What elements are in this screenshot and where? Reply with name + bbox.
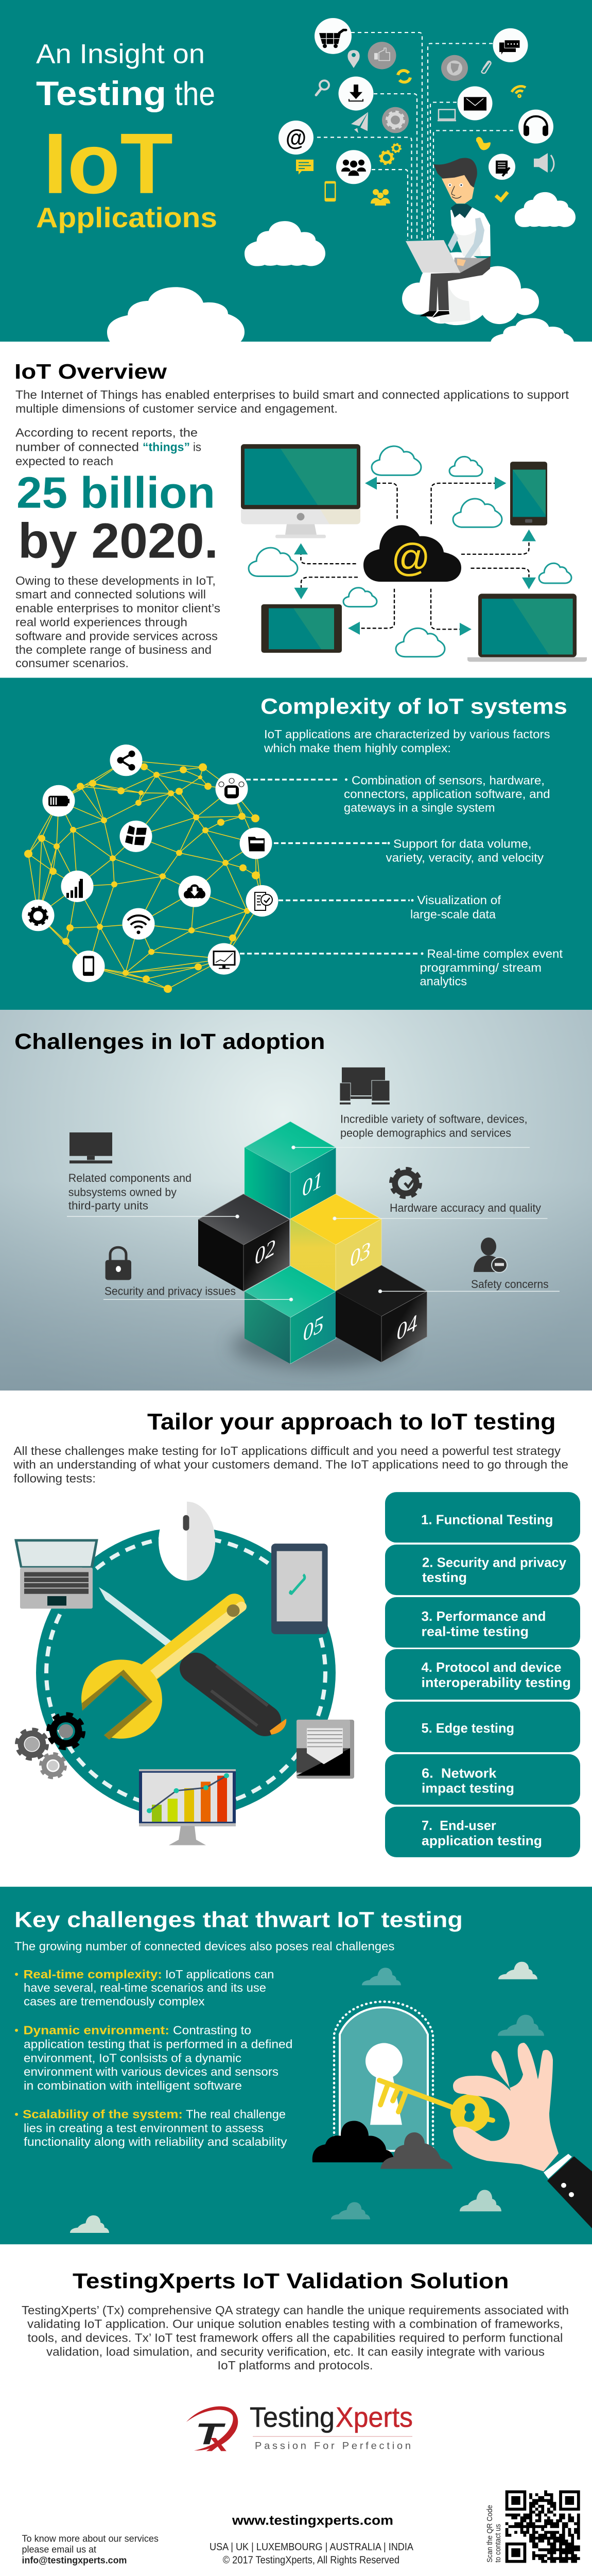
gray cloud xyxy=(380,2132,452,2169)
icon: cloud with at sign xyxy=(363,525,461,582)
body text: real world experiences through xyxy=(15,616,187,629)
contact text: please email us at xyxy=(22,2545,97,2555)
title: the: the xyxy=(175,75,215,112)
test 4 xyxy=(385,1649,580,1700)
factor 3: large-scale data xyxy=(410,908,496,921)
test 7 xyxy=(385,1807,580,1857)
body text: IoT platforms and protocols. xyxy=(217,2359,373,2372)
text: variety xyxy=(340,1112,528,1139)
body text: validating IoT application. Our unique solution enables testing with a combination of frameworks, xyxy=(27,2318,563,2331)
icon: globe xyxy=(441,55,468,81)
challenge: scalability xyxy=(15,2108,287,2149)
cube 03 xyxy=(290,1194,381,1291)
mesh network xyxy=(22,744,278,993)
cloud: right xyxy=(515,192,576,227)
body text: software and provide services across xyxy=(15,630,218,643)
icon: chat xyxy=(493,28,528,62)
icon: battery xyxy=(42,785,75,817)
cube 01: 01 xyxy=(302,1166,323,1202)
factor 4 xyxy=(240,948,563,989)
factor 4: programming/ stream xyxy=(420,961,542,975)
text: related components: Related components and xyxy=(68,1171,191,1184)
black cloud xyxy=(312,2121,394,2162)
outline clouds xyxy=(249,446,571,657)
statistic: by 2020: by 2020. xyxy=(18,514,218,568)
title: Testing: Testing xyxy=(36,75,166,113)
statistic lead-in: number of connected xyxy=(15,441,139,454)
body text xyxy=(15,574,220,670)
factor 3 xyxy=(278,894,501,921)
intro text: multiple dimensions of customer service and engagement. xyxy=(15,402,338,416)
cube 01 xyxy=(245,1122,336,1219)
illustration: keyhole door xyxy=(312,2002,592,2228)
test 4: 4. Protocol and device xyxy=(421,1660,561,1675)
test 3: 3. Performance and xyxy=(421,1608,546,1624)
panel: Complexity of IoT systems xyxy=(0,678,592,1010)
test 6 xyxy=(385,1754,580,1805)
test 4: interoperability testing xyxy=(421,1675,571,1690)
icon: screwdriver xyxy=(99,1587,286,1735)
cube 05 xyxy=(245,1266,336,1364)
test list xyxy=(385,1492,580,1857)
cloud: bottom right xyxy=(491,318,574,353)
device: tablet xyxy=(262,604,342,653)
icon: thumbs up xyxy=(368,42,396,69)
data streams xyxy=(317,32,513,240)
icon: gears xyxy=(18,1715,83,1777)
logo: Testing xyxy=(250,2401,335,2433)
text: related components xyxy=(68,1171,191,1212)
icon: signal xyxy=(61,871,94,902)
test 3 xyxy=(385,1597,580,1648)
locations: USA | UK | LUXEMBOURG | AUSTRALIA | INDIA xyxy=(210,2541,413,2553)
diagram: connected devices xyxy=(241,444,587,662)
icon: paper plane xyxy=(351,112,368,133)
heading: Challenges in IoT adoption xyxy=(14,1029,325,1054)
icon: sync xyxy=(398,71,410,82)
icon: yellow group xyxy=(371,189,390,206)
contact text: info@testingxperts.com xyxy=(22,2555,127,2566)
cube shadow xyxy=(232,1323,407,1368)
cube 05: 05 xyxy=(303,1311,324,1347)
statistic lead-in xyxy=(15,427,201,468)
QR caption xyxy=(486,2505,502,2563)
QR caption: Scan the QR Code xyxy=(486,2505,494,2563)
subheading: The growing number of connected devices also poses real challenges xyxy=(14,1940,394,1953)
challenge: dynamic environment: environment with various devices and sensors xyxy=(24,2065,278,2079)
cube 03: 03 xyxy=(350,1236,371,1273)
factor 3: Visualization of xyxy=(417,894,501,907)
icon: windows xyxy=(119,821,152,852)
statistic lead-in: According to recent reports, the xyxy=(15,427,198,439)
icon: at sign: @ xyxy=(286,125,306,150)
statistic lead-in: “things” xyxy=(143,441,190,454)
sleeve xyxy=(544,2154,592,2228)
text: variety: people demographics and services xyxy=(340,1126,511,1139)
test 2: 2. Security and privacy xyxy=(422,1555,566,1570)
device: laptop xyxy=(467,594,587,662)
test 1: 1. Functional Testing xyxy=(421,1512,553,1528)
icon: laptop xyxy=(438,110,456,121)
challenge: dynamic environment xyxy=(15,2024,292,2093)
panel: Key challenges xyxy=(0,1887,592,2244)
body text: All these challenges make testing for IoT applications difficult and you need a powerful test strategy xyxy=(13,1445,561,1458)
icon: wifi yellow xyxy=(512,86,526,97)
body text xyxy=(22,2304,569,2372)
challenge: real-time complexity: IoT applications can xyxy=(165,1968,274,1981)
heading: IoT Overview xyxy=(14,360,167,383)
icon: paperclip xyxy=(482,61,491,73)
intro text: The Internet of Things has enabled enterprises to build smart and connected applications to support xyxy=(15,388,569,402)
icon: key xyxy=(379,2080,493,2132)
panel: hero xyxy=(0,0,592,353)
cloud: bottom left xyxy=(107,287,245,350)
callout lines xyxy=(67,1146,560,1301)
text: security: Security and privacy issues xyxy=(105,1284,236,1298)
factor 4: analytics xyxy=(420,975,467,989)
logo: Passion For Perfection xyxy=(255,2441,411,2451)
icon: bar chart monitor xyxy=(139,1769,236,1845)
icon: envelope xyxy=(297,1720,354,1778)
challenge: real-time complexity: cases are tremendously complex xyxy=(24,1995,205,2009)
icon: phone xyxy=(324,181,336,201)
test 5: 5. Edge testing xyxy=(421,1720,514,1736)
icon: computer xyxy=(69,1132,112,1163)
challenge: real-time complexity xyxy=(15,1968,274,2009)
icon: mouse xyxy=(159,1502,215,1581)
panel: Challenges in IoT adoption xyxy=(0,1010,592,1391)
icon: document xyxy=(489,154,515,180)
test 6: 6. Network xyxy=(422,1766,497,1781)
icon: bird xyxy=(476,137,491,150)
text: related components: subsystems owned by xyxy=(68,1185,177,1198)
copyright: © 2017 TestingXperts, All Rights Reserved xyxy=(223,2554,399,2566)
body text: Owing to these developments in IoT, xyxy=(15,574,216,588)
text: related components: third-party units xyxy=(68,1199,148,1212)
icon: at sign xyxy=(278,121,314,155)
heading: Complexity of IoT systems xyxy=(260,694,567,719)
test 5 xyxy=(385,1702,580,1752)
body text: the complete range of business and xyxy=(15,643,212,657)
title: Applications: Applications xyxy=(36,202,217,233)
icon: analytics monitor xyxy=(208,943,240,975)
icon: download xyxy=(339,77,374,111)
challenge: dynamic environment: application testing that is performed in a defined xyxy=(24,2038,292,2052)
factor 2: Support for data volume, xyxy=(393,838,532,851)
statistic lead-in: is xyxy=(193,441,201,454)
icon: settings xyxy=(382,107,409,133)
cube 02 xyxy=(198,1194,289,1291)
icon: people xyxy=(336,150,371,184)
icon: safety person xyxy=(474,1238,507,1273)
connector arrows xyxy=(294,477,536,636)
test 2: testing xyxy=(422,1570,467,1585)
icon: location pin xyxy=(347,50,360,68)
icon: yellow gears xyxy=(380,144,401,164)
factor 1: Combination of sensors, hardware, xyxy=(352,774,545,787)
icon: gear xyxy=(22,900,55,931)
logo: T xyxy=(195,2417,226,2451)
text: hardware: Hardware accuracy and quality xyxy=(390,1201,542,1214)
icon: cart xyxy=(315,18,352,54)
dashed connectors xyxy=(301,483,529,629)
challenge: dynamic environment: Dynamic environment: xyxy=(24,2024,169,2037)
body text: validation, load simulation, and security verification, etc. It can easily integrate with various xyxy=(46,2346,545,2359)
logo xyxy=(186,2401,413,2456)
statistic lead-in: expected to reach xyxy=(15,455,113,468)
illustration: person on cloud xyxy=(402,158,539,325)
icon: mail xyxy=(457,86,492,120)
test 7: 7. End-user xyxy=(422,1818,496,1833)
cube 04 xyxy=(336,1265,427,1362)
icon: connected systems xyxy=(215,773,248,805)
heading: TestingXperts IoT Validation Solution xyxy=(73,2269,509,2293)
icon: lock xyxy=(106,1247,131,1280)
icon: gear check xyxy=(391,1169,420,1197)
logo: x xyxy=(206,2429,231,2456)
test 1 xyxy=(385,1492,580,1543)
challenge: scalability: The real challenge xyxy=(186,2108,286,2122)
icon: headphones xyxy=(518,110,553,144)
challenge: scalability: lies in creating a test environment to assess xyxy=(24,2122,264,2135)
challenge: real-time complexity: have several, real-time scenarios and its use xyxy=(24,1981,266,1995)
factor 4: Real-time complex event xyxy=(427,948,563,961)
icon: folder xyxy=(240,827,272,859)
title: IoT: IoT xyxy=(43,115,173,211)
icon: devices xyxy=(340,1067,390,1105)
statistic: 25 billion: 25 billion xyxy=(16,468,215,517)
body text: with an understanding of what your customers demand. The IoT applications need to go through the xyxy=(13,1459,568,1471)
icon: cloud download xyxy=(178,876,211,907)
body text: following tests: xyxy=(13,1472,96,1485)
challenge: dynamic environment: environment, IoT conlsists of a dynamic xyxy=(24,2052,241,2065)
test 2 xyxy=(385,1545,580,1595)
icon: wrench xyxy=(81,1604,241,1740)
icon: wifi xyxy=(123,908,154,940)
test 6: impact testing xyxy=(422,1781,514,1796)
website: www.testingxperts.com xyxy=(232,2513,393,2528)
QR code xyxy=(506,2490,580,2563)
body text: tools, and devices. Tx’ IoT test framework offers all the capabilities required to perform functional xyxy=(28,2332,563,2345)
challenge: scalability: Scalability of the system: xyxy=(23,2108,183,2122)
factor 1 xyxy=(246,774,550,815)
title: An Insight on: An Insight on xyxy=(36,39,205,69)
logo: Xperts xyxy=(336,2401,413,2433)
icon: speaker xyxy=(534,153,554,173)
intro text: which make them highly complex: xyxy=(264,742,451,755)
text: safety: Safety concerns xyxy=(471,1277,549,1291)
body text: enable enterprises to monitor client’s xyxy=(15,602,220,615)
panel: IoT Overview xyxy=(0,342,592,678)
body text: TestingXperts’ (Tx) comprehensive QA strategy can handle the unique requirements associated with xyxy=(22,2304,569,2317)
illustration: tools circle xyxy=(14,1502,354,1845)
contact text xyxy=(22,2534,159,2566)
icon: phone xyxy=(271,1544,328,1634)
challenge: real-time complexity: Real-time complexity: xyxy=(24,1968,162,1981)
hand xyxy=(453,2043,559,2172)
intro text xyxy=(264,728,550,755)
icon: search xyxy=(316,80,329,95)
factor 2 xyxy=(274,838,544,865)
panel: Tailor your approach xyxy=(0,1391,592,1887)
heading: Key challenges that thwart IoT testing xyxy=(14,1908,463,1932)
QR caption: to contact us xyxy=(494,2524,502,2563)
icon: share xyxy=(110,744,142,776)
body text xyxy=(13,1445,568,1485)
panel: TestingXperts solution xyxy=(0,2244,592,2576)
icon: speech bubble xyxy=(296,160,314,175)
body text: consumer scenarios. xyxy=(15,657,129,670)
factor 1: connectors, application software, and xyxy=(344,788,550,801)
cloud: mid left xyxy=(245,221,325,266)
heading: Tailor your approach to IoT testing xyxy=(147,1409,556,1435)
cube 04: 04 xyxy=(397,1310,417,1346)
factor 1: gateways in a single system xyxy=(344,802,495,815)
text: variety: Incredible variety of software, devices, xyxy=(340,1112,528,1126)
factor 2: variety, veracity, and velocity xyxy=(386,852,544,865)
test 7: application testing xyxy=(422,1833,542,1848)
decorative small clouds xyxy=(70,1962,544,2233)
body text: smart and connected solutions will xyxy=(15,588,206,602)
device: smartphone xyxy=(510,462,547,526)
icon: report check xyxy=(246,885,278,917)
test 3: real-time testing xyxy=(421,1624,529,1639)
intro text: IoT applications are characterized by various factors xyxy=(264,728,550,741)
icon: phone xyxy=(72,951,105,982)
icon: laptop xyxy=(14,1539,98,1608)
challenge: scalability: functionality along with reliability and scalability xyxy=(24,2136,287,2149)
device: desktop monitor xyxy=(241,444,360,538)
intro text xyxy=(15,388,569,416)
cube 02: 02 xyxy=(255,1234,275,1270)
icon: check xyxy=(496,192,508,200)
challenge: dynamic environment: Contrasting to xyxy=(173,2024,251,2037)
icon: cloud with at sign: @ xyxy=(391,536,430,580)
contact text: To know more about our services xyxy=(22,2534,159,2545)
challenge: dynamic environment: in combination with intelligent software xyxy=(24,2079,242,2093)
